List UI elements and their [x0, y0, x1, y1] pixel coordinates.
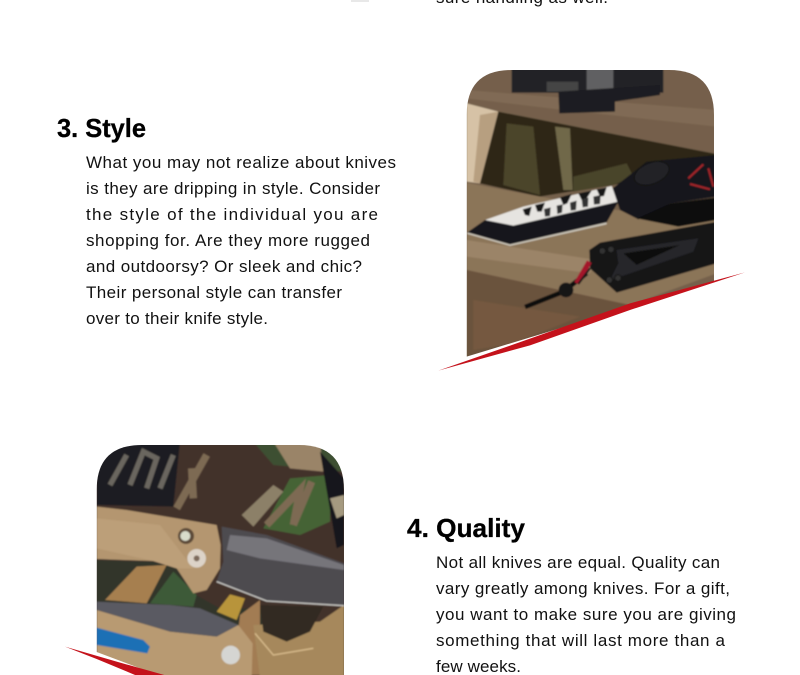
- photo: damascus folding knives on camouflage: [65, 442, 347, 675]
- text block: style description: What you may not realize about knives: [86, 153, 396, 172]
- white wedge below the slash: [463, 283, 717, 380]
- text block: style description: and outdoorsy? Or sleek and chic?: [86, 257, 362, 276]
- text block: style description: [86, 153, 396, 328]
- fragment of previous section image: [351, 0, 369, 2]
- red slash across photo corner: [65, 647, 167, 675]
- text block: quality description: something that will last more than a: [436, 631, 726, 650]
- text block: style description: the style of the individual you are: [86, 205, 378, 224]
- text block: style description: Their personal style can transfer: [86, 283, 342, 302]
- heading: 4. Quality: 4. Quality: [407, 513, 526, 543]
- text block: style description: shopping for. Are they more rugged: [86, 231, 370, 250]
- text block: quality description: [436, 553, 736, 675]
- text block: quality description: you want to make sure you are giving: [436, 605, 736, 624]
- text block: style description: over to their knife style.: [86, 309, 268, 328]
- text block: quality description: Not all knives are equal. Quality can: [436, 553, 720, 572]
- red slash under photo: [438, 272, 745, 371]
- text block: style description: is they are dripping in style. Consider: [86, 179, 380, 198]
- text block: quality description: vary greatly among knives. For a gift,: [436, 579, 730, 598]
- photo: black tanto knife on wooden crate: [438, 67, 745, 380]
- heading: 3. Style: 3. Style: [57, 113, 146, 143]
